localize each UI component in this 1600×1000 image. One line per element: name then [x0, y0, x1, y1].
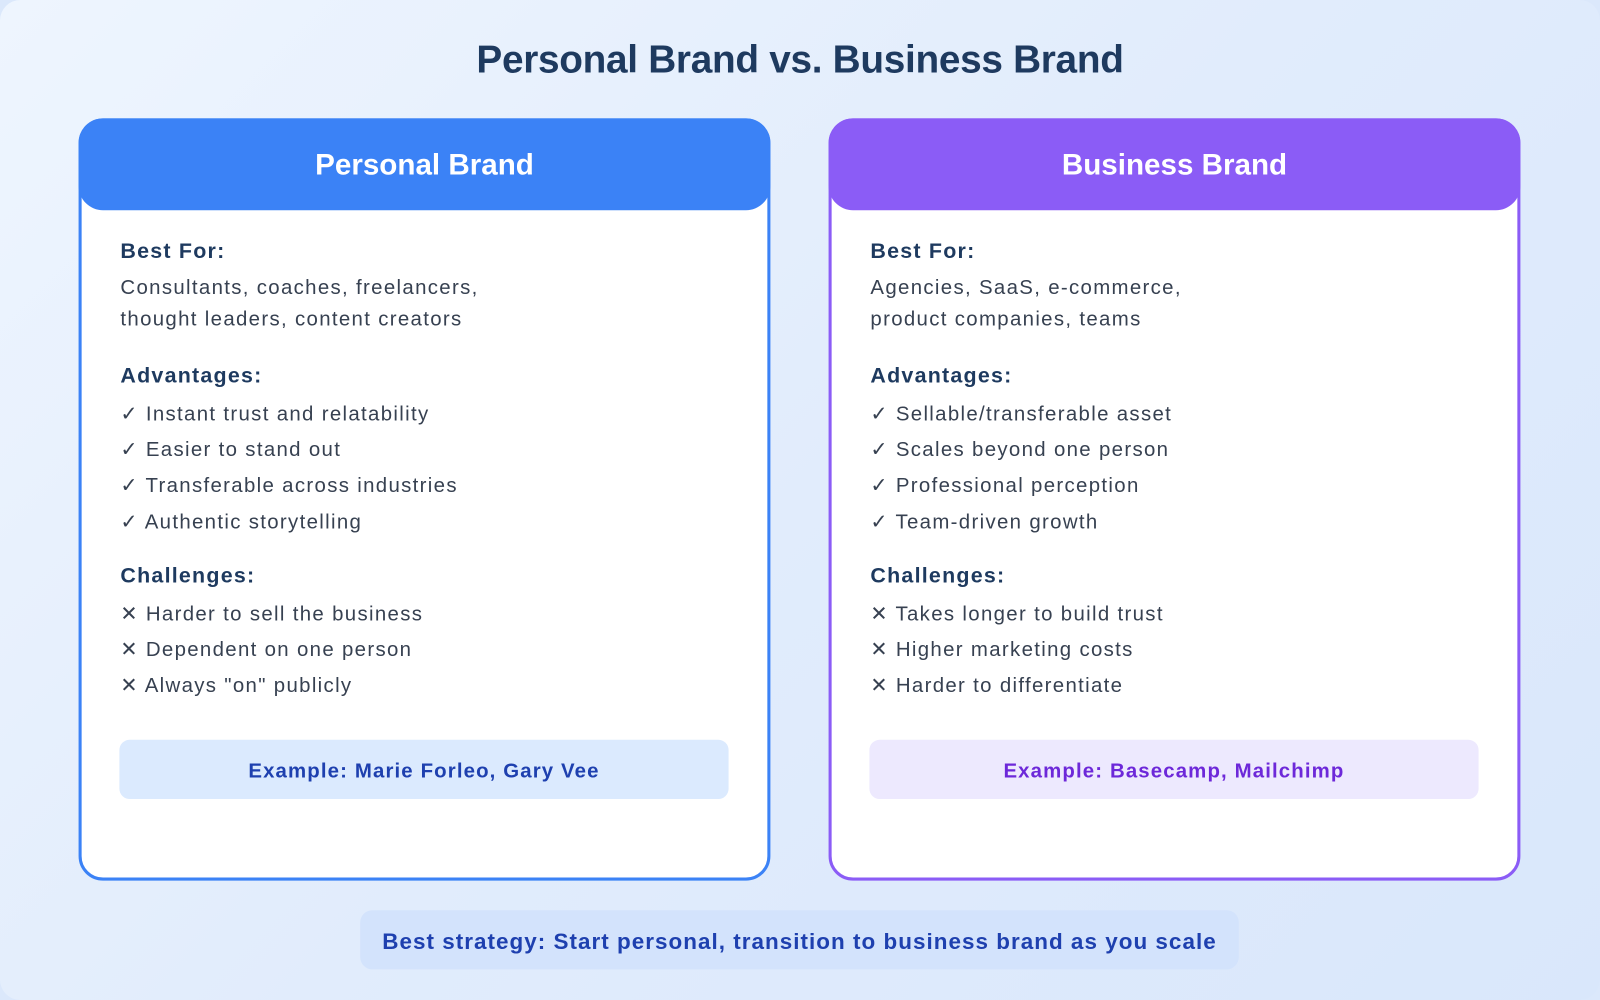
panel: business brand: ✓ Professional perception: [870, 474, 1140, 497]
panel: business brand: product companies, teams: [870, 308, 1142, 331]
panel: business brand: Best For:: [870, 240, 975, 263]
panel: personal brand: ✓ Authentic storytelling: [120, 511, 362, 534]
panel: personal brand: ✓ Instant trust and relatability: [120, 403, 430, 426]
panel: personal brand: ✕ Always "on" publicly: [120, 674, 352, 697]
callout: best strategy: Best strategy: Start personal, transition to business brand as you scale: [382, 929, 1217, 954]
panel: business brand: ✕ Harder to differentiate: [870, 674, 1123, 697]
panel: personal brand: Advantages:: [120, 364, 262, 388]
panel: personal brand: ✓ Transferable across industries: [120, 474, 458, 497]
callout: best strategy: [360, 910, 1239, 969]
panel: business brand: Challenges:: [870, 564, 1005, 588]
panel: business brand: ✓ Scales beyond one person: [870, 439, 1169, 461]
header: personal brand: [79, 118, 770, 210]
header: business brand: [829, 118, 1520, 210]
panel: business brand: ✕ Takes longer to build trust: [870, 603, 1164, 626]
text block: business brand content: [870, 240, 1182, 697]
callout: personal example: Example: Marie Forleo, Gary Vee: [248, 760, 600, 783]
callout: business example: [869, 740, 1479, 799]
text block: personal brand content: [120, 240, 479, 697]
panel: personal brand: [79, 118, 770, 881]
panel: personal brand: thought leaders, content creators: [120, 308, 463, 331]
panel: business brand: [829, 118, 1520, 881]
panel: business brand: Agencies, SaaS, e-commerce,: [870, 277, 1182, 299]
panel: business brand: Advantages:: [870, 364, 1012, 388]
header: personal brand: Personal Brand: [315, 149, 534, 182]
panel: personal brand: Consultants, coaches, freelancers,: [120, 277, 479, 299]
panel: personal brand: Challenges:: [120, 564, 255, 588]
callout: personal example: [119, 740, 729, 799]
header: business brand: Business Brand: [1062, 149, 1287, 182]
panel: personal brand: ✓ Easier to stand out: [120, 439, 341, 461]
callout: business example: Example: Basecamp, Mailchimp: [1003, 760, 1345, 783]
panel: personal brand: Best For:: [120, 240, 225, 263]
panel: business brand: ✓ Sellable/transferable asset: [870, 403, 1172, 426]
panel: business brand: ✕ Higher marketing costs: [870, 639, 1134, 661]
panel: personal brand: ✕ Harder to sell the business: [120, 603, 423, 626]
panel: personal brand: ✕ Dependent on one person: [120, 639, 412, 661]
panel: business brand: ✓ Team-driven growth: [870, 511, 1099, 534]
title: Personal Brand vs. Business Brand: [476, 39, 1124, 82]
